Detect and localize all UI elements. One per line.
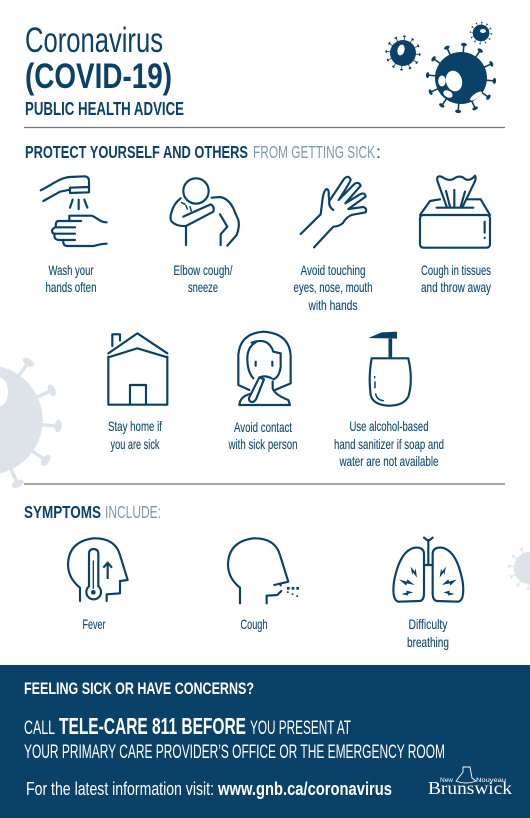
- item: fever: Fever: [82, 616, 106, 632]
- icon: head with thermometer: [68, 538, 128, 601]
- item: difficulty breathing: Difficulty: [408, 616, 448, 632]
- text: call tele-care: TELE-CARE 811 BEFORE: [59, 713, 246, 739]
- heading: feeling sick: FEELING SICK OR HAVE CONCERNS?: [24, 680, 254, 698]
- heading: symptoms: INCLUDE:: [105, 502, 161, 522]
- item: stay home: [108, 333, 167, 452]
- title block: PUBLIC HEALTH ADVICE: [25, 99, 184, 119]
- text: call tele-care: CALL: [24, 718, 55, 739]
- item: avoid touching: with hands: [308, 297, 358, 313]
- item: tissues: and throw away: [421, 279, 491, 295]
- background virus: right: [508, 546, 530, 590]
- item: sanitizer: hand sanitizer if soap and: [334, 436, 444, 452]
- heading: symptoms: SYMPTOMS: [24, 502, 101, 522]
- logo: New Brunswick: Nouveau: [476, 778, 506, 784]
- title block: [25, 21, 184, 119]
- item: avoid touching: eyes, nose, mouth: [294, 279, 372, 295]
- icon: lungs: [393, 538, 463, 602]
- icon: pump bottle: [368, 332, 411, 406]
- logo: New Brunswick: [428, 767, 512, 798]
- icon: hand washing: [41, 176, 107, 246]
- heading: protect yourself: FROM GETTING SICK: [253, 142, 375, 162]
- logo: New Brunswick: Brunswick: [428, 778, 512, 798]
- icon: virus cluster: [385, 22, 496, 113]
- item: wash hands: [41, 176, 107, 295]
- icon: house: [108, 333, 167, 405]
- item: tissues: [420, 176, 491, 295]
- item: stay home: Stay home if: [108, 418, 162, 434]
- item: sanitizer: water are not available: [339, 453, 439, 469]
- heading: protect yourself: :: [376, 142, 381, 162]
- item: sanitizer: Use alcohol-based: [350, 418, 428, 434]
- item: cough: [228, 538, 299, 632]
- item: elbow cough: sneeze: [188, 279, 218, 295]
- item: elbow cough: Elbow cough/: [174, 262, 233, 278]
- item: avoid contact: [228, 332, 298, 452]
- panel: call to action: [0, 665, 530, 818]
- item: stay home: you are sick: [110, 436, 160, 452]
- icon: person coughing into elbow: [170, 178, 239, 246]
- item: cough: Cough: [240, 616, 268, 632]
- heading: protect yourself: PROTECT YOURSELF AND OTHERS: [25, 142, 248, 162]
- title block: Coronavirus: [25, 21, 163, 60]
- item: tissues: Cough in tissues: [421, 262, 491, 278]
- title block: (COVID-19): [25, 57, 172, 96]
- item: wash hands: Wash your: [48, 262, 94, 278]
- item: avoid touching: [294, 177, 372, 313]
- icon: sick person with thermometer: [238, 332, 291, 405]
- item: difficulty breathing: breathing: [407, 634, 449, 650]
- item: elbow cough: [170, 178, 239, 295]
- icon: tissue box: [420, 176, 490, 248]
- icon: open hand: [301, 177, 366, 247]
- item: sanitizer: [334, 332, 444, 469]
- item: avoid contact: with sick person: [228, 436, 298, 452]
- text: call tele-care: [24, 713, 445, 763]
- text: website: [26, 778, 392, 799]
- item: difficulty breathing: [393, 538, 463, 650]
- item: avoid touching: Avoid touching: [300, 262, 366, 278]
- item: avoid contact: Avoid contact: [234, 419, 292, 435]
- item: fever: [68, 538, 128, 632]
- background virus: left: [0, 346, 62, 494]
- logo: New Brunswick: New: [440, 778, 454, 784]
- item: wash hands: hands often: [46, 279, 96, 295]
- text: call tele-care: YOU PRESENT AT: [250, 718, 351, 739]
- icon: head coughing: [228, 538, 299, 603]
- text: website: www.gnb.ca/coronavirus: [217, 778, 392, 799]
- text: website: For the latest information visit:: [26, 778, 214, 799]
